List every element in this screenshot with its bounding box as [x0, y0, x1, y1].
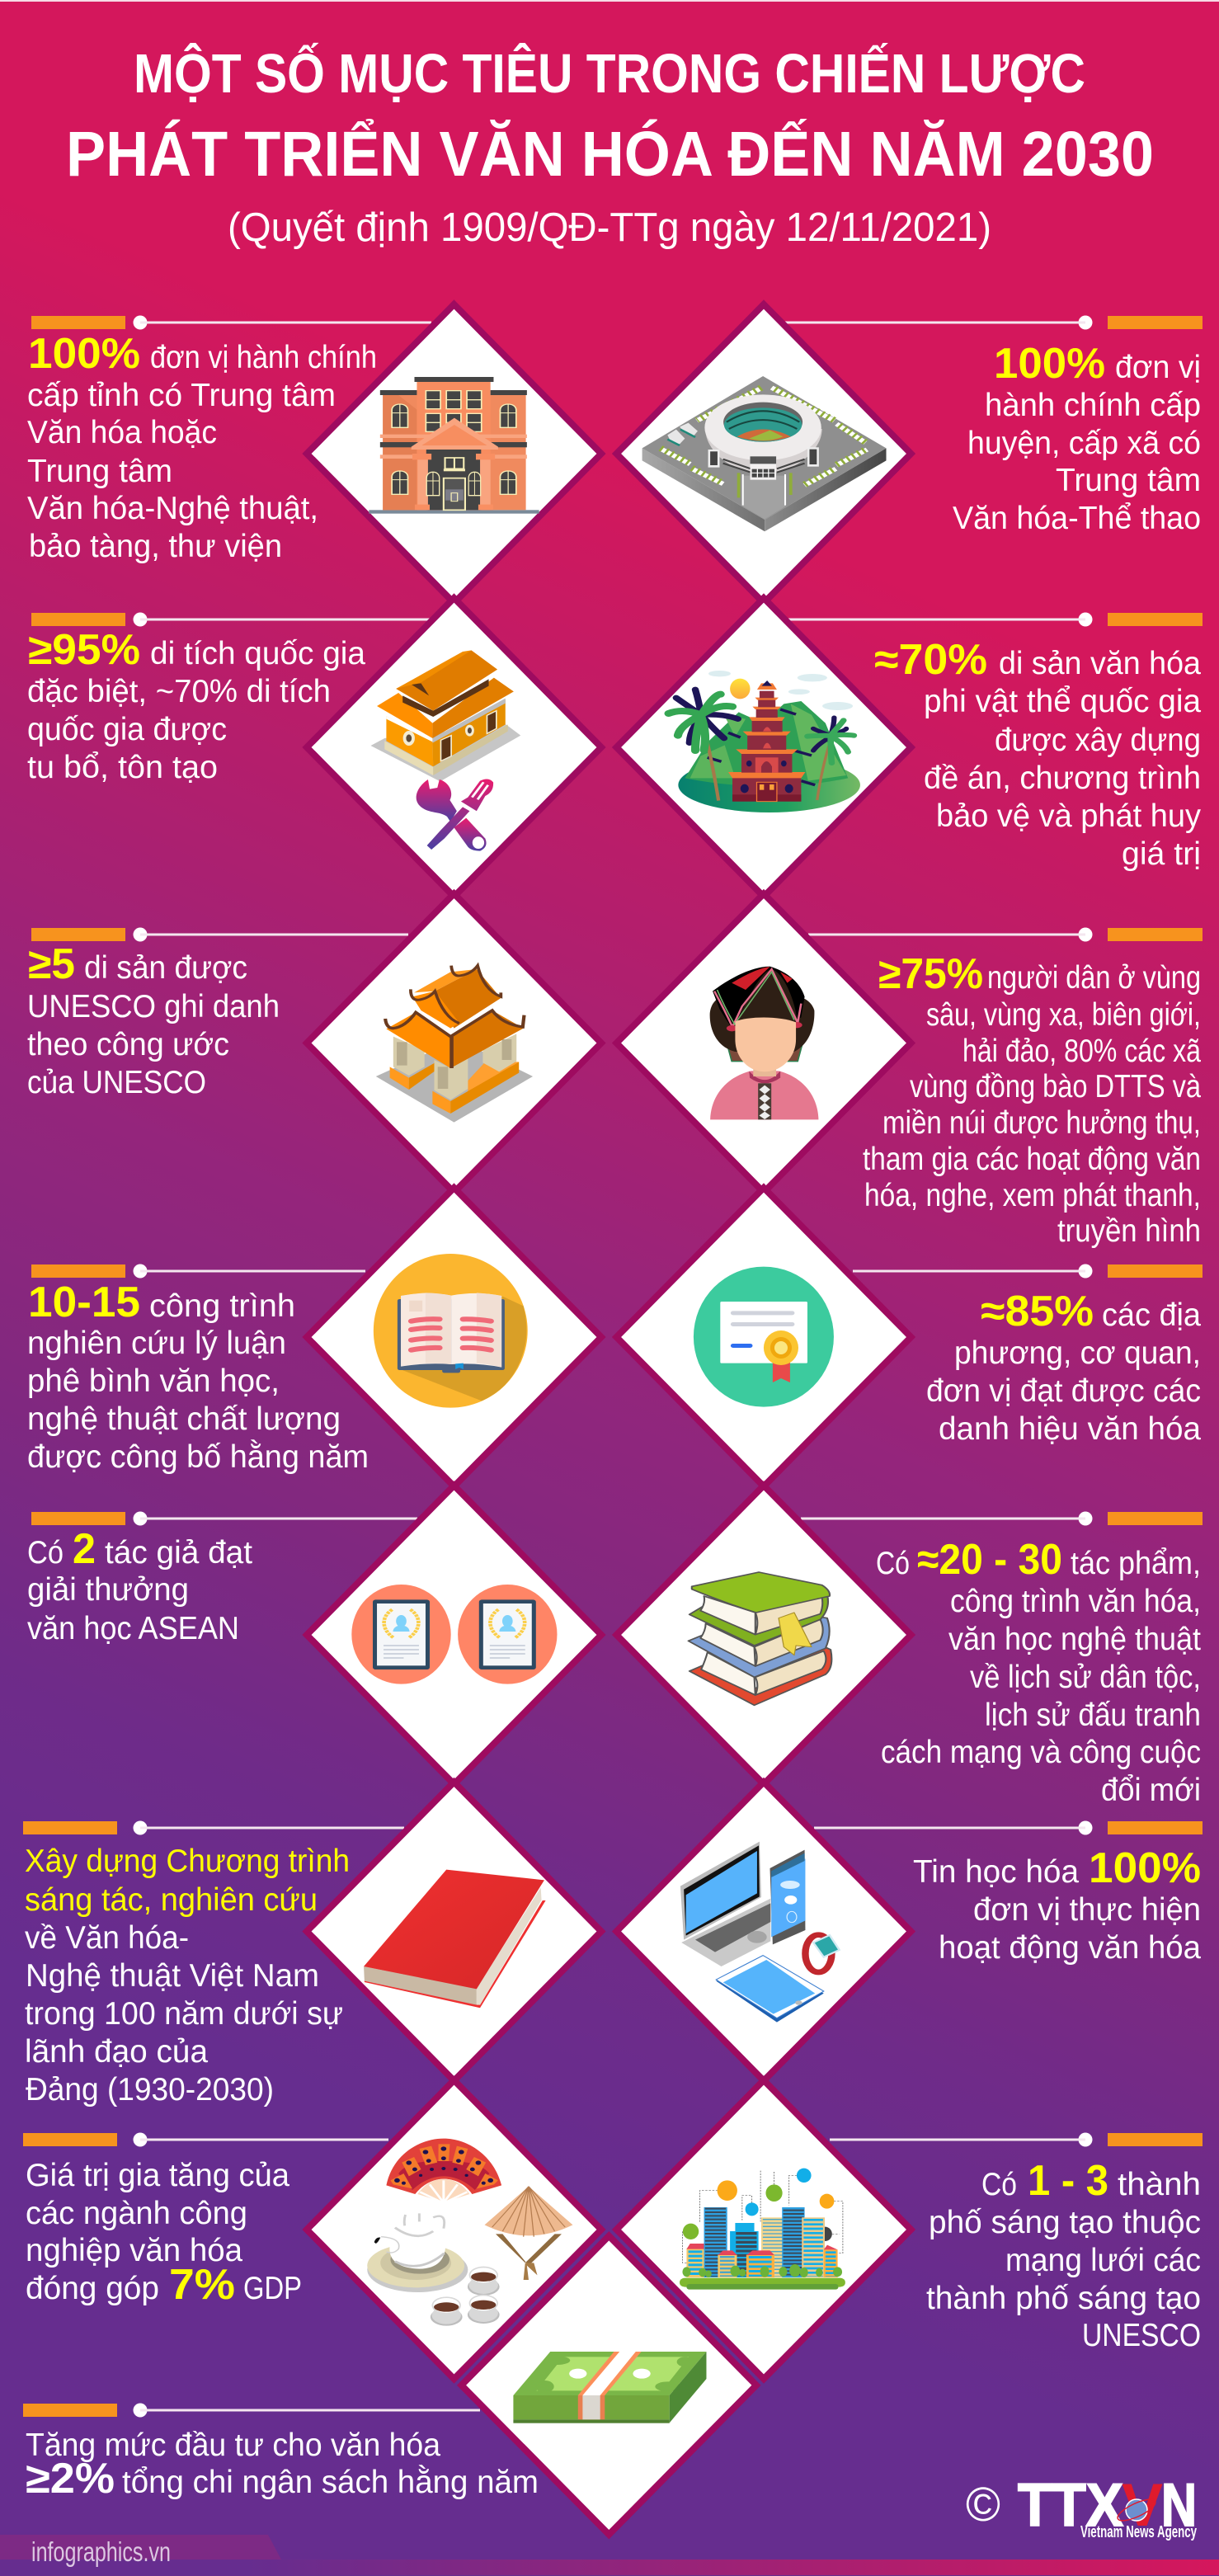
diamond: row 3 left: [307, 894, 601, 1193]
text: 20-30 tác phẩm: Có: [876, 1546, 910, 1581]
panel: item 5 right: [801, 1511, 1203, 1808]
text: 100% cấp huyện: Văn hóa-Thể thao: [953, 501, 1201, 536]
website credit: infographics.vn: [31, 2536, 171, 2567]
panel: item 4 left: [27, 1264, 369, 1475]
text: 5 di sản: [27, 940, 280, 1100]
text: 100% cấp tỉnh: 100%: [28, 330, 140, 378]
text: 100% cấp huyện: đơn vị: [1115, 350, 1201, 385]
text: 70% di sản: ≈70%: [874, 636, 987, 684]
text: chương trình sáng tác: Xây dựng Chương trình: [25, 1844, 350, 1879]
text: 70% di sản: [874, 636, 1201, 872]
text: 7% GDP: GDP: [243, 2271, 302, 2306]
diamond: row 7 left: [307, 2080, 601, 2379]
icon: building: [369, 377, 539, 514]
text: 20-30 tác phẩm: lịch sử đấu tranh: [985, 1698, 1201, 1733]
text: 85% các địa phương: phương, cơ quan,: [954, 1335, 1201, 1371]
panel: item 8: [23, 2404, 539, 2503]
text: 85% các địa phương: ≈85%: [981, 1288, 1094, 1335]
diamond: row 6 right: [617, 1782, 911, 2080]
text: 95% di tích: [27, 626, 365, 785]
text: 2% ngân sách: tổng chi ngân sách hằng năm: [122, 2465, 539, 2500]
text: chương trình sáng tác: về Văn hóa-: [25, 1920, 189, 1956]
text: 1-3 thành phố: 1 - 3: [1028, 2157, 1108, 2205]
panel: item 3 left: [27, 927, 408, 1100]
text: 75% người dân: truyền hình: [1057, 1213, 1201, 1249]
text: 2% ngân sách: [26, 2428, 539, 2503]
panel: item 3 right: [808, 927, 1203, 1249]
text: chương trình sáng tác: sáng tác, nghiên cứu: [25, 1882, 318, 1918]
text: tin học hóa: hoạt động văn hóa: [939, 1930, 1201, 1966]
icon: red book: [364, 1870, 546, 2008]
text: 100% cấp tỉnh: [27, 330, 377, 564]
text: 2 tác giả: tác giả đạt: [105, 1535, 252, 1571]
text: 5 di sản: của UNESCO: [27, 1065, 206, 1100]
logo: TTXVN: [966, 2472, 1198, 2541]
footer tab: [0, 2535, 281, 2560]
text: 100% cấp tỉnh: Văn hóa-Nghệ thuật,: [27, 491, 318, 526]
text: 10-15 công trình: phê bình văn học,: [27, 1363, 280, 1399]
fan: [386, 2139, 501, 2202]
logo: TTXVN: TTX: [1018, 2472, 1123, 2539]
diamond: row 5 left: [307, 1486, 601, 1784]
text: 95% di tích: tu bổ, tôn tạo: [27, 750, 218, 785]
text: 70% di sản: di sản văn hóa: [999, 646, 1201, 681]
text: 5 di sản: theo công ước: [27, 1027, 229, 1062]
icon: fan, teapot and conical hat: [367, 2139, 572, 2326]
icon: ethnic woman: [710, 967, 818, 1119]
panel: item 2 left: [27, 612, 439, 785]
text: tin học hóa: [913, 1844, 1201, 1966]
text: 95% di tích: quốc gia được: [27, 712, 227, 747]
text: 10-15 công trình: nghệ thuật chất lượng: [27, 1401, 341, 1437]
text: 1-3 thành phố: Có: [981, 2167, 1017, 2202]
text: chương trình sáng tác: trong 100 năm dưới sự: [25, 1996, 343, 2032]
text: 100% cấp huyện: [953, 340, 1201, 536]
text: 100% cấp tỉnh: Văn hóa hoặc: [27, 415, 217, 450]
text: 2 tác giả: văn học ASEAN: [27, 1611, 239, 1646]
diamond: row 2 left: [307, 598, 601, 897]
title: (Quyết định 1909/QĐ-TTg ngày 12/11/2021): [228, 205, 991, 250]
text: 95% di tích: đặc biệt, ~70% di tích: [27, 674, 331, 709]
text: 7% GDP: 7%: [169, 2261, 235, 2309]
text: 75% người dân: [863, 950, 1201, 1249]
panel: item 6 left: [23, 1821, 404, 2107]
text: 2 tác giả: Có: [27, 1535, 64, 1571]
text: 5 di sản: UNESCO ghi danh: [27, 989, 280, 1024]
text: 1-3 thành phố: thành: [1118, 2167, 1201, 2202]
icon: pagoda and palms: [669, 671, 860, 812]
logo: TTXVN: N: [1161, 2472, 1197, 2539]
icon: stadium: [642, 376, 886, 531]
text: 5 di sản: ≥5: [28, 940, 75, 988]
icon: two diplomas: [351, 1585, 557, 1684]
text: 95% di tích: ≥95%: [28, 626, 140, 674]
text: 85% các địa phương: [926, 1288, 1201, 1447]
text: 10-15 công trình: công trình: [149, 1288, 295, 1324]
text: 10-15 công trình: [27, 1279, 369, 1475]
text: 10-15 công trình: được công bố hằng năm: [27, 1439, 369, 1475]
text: 20-30 tác phẩm: đổi mới: [1101, 1773, 1201, 1808]
text: 2 tác giả: [27, 1525, 252, 1646]
text: 2% ngân sách: Tăng mức đầu tư cho văn hóa: [26, 2428, 440, 2463]
text: 7% GDP: các ngành công: [26, 2196, 247, 2231]
footer strip: [0, 2560, 1219, 2575]
icon: digital devices: [680, 1842, 840, 2023]
text: 20-30 tác phẩm: văn học nghệ thuật: [948, 1622, 1201, 1657]
text: 1-3 thành phố: UNESCO: [1082, 2318, 1201, 2353]
top edge line: [0, 0, 1219, 2]
text: 10-15 công trình: nghiên cứu lý luận: [27, 1326, 286, 1361]
text: 95% di tích: di tích quốc gia: [150, 636, 365, 671]
text: 7% GDP: đóng góp: [26, 2271, 159, 2306]
panel: item 6 right: [814, 1821, 1203, 1966]
text: 1-3 thành phố: phố sáng tạo thuộc: [929, 2205, 1201, 2240]
text: 70% di sản: bảo vệ và phát huy: [936, 798, 1201, 834]
text: 20-30 tác phẩm: tác phẩm,: [1071, 1546, 1201, 1581]
text: 100% cấp huyện: Trung tâm: [1056, 463, 1201, 498]
text: 20-30 tác phẩm: [876, 1536, 1201, 1808]
logo: TTXVN: V: [1122, 2472, 1163, 2539]
text: 85% các địa phương: danh hiệu văn hóa: [939, 1411, 1201, 1447]
text: 100% cấp tỉnh: bảo tàng, thư viện: [29, 529, 282, 564]
teapot set: [367, 2213, 500, 2326]
text: 100% cấp huyện: hành chính cấp: [985, 388, 1201, 423]
icon: open book on yellow circle: [374, 1254, 528, 1408]
text: 7% GDP: [26, 2158, 302, 2309]
text: tin học hóa: Tin học hóa: [913, 1854, 1079, 1890]
text: 20-30 tác phẩm: ≈20 - 30: [917, 1536, 1062, 1584]
text: 2 tác giả: 2: [73, 1525, 96, 1573]
panel: item 5 left: [27, 1511, 417, 1646]
text: 70% di sản: được xây dựng: [995, 723, 1201, 758]
text: 5 di sản: di sản được: [84, 950, 247, 986]
icon: stack of books: [689, 1572, 831, 1705]
title: [66, 42, 1154, 250]
text: 7% GDP: nghiệp văn hóa: [26, 2233, 242, 2268]
icon: temple: [376, 966, 533, 1123]
text: 100% cấp huyện: 100%: [994, 340, 1105, 388]
text: chương trình sáng tác: Đảng (1930-2030): [26, 2072, 274, 2107]
text: 70% di sản: đề án, chương trình: [924, 761, 1201, 796]
panel: item 4 right: [853, 1264, 1203, 1447]
panel: item 7 right: [830, 2133, 1203, 2353]
diamond: row 3 right: [617, 894, 911, 1193]
panel: item 2 right: [784, 612, 1203, 872]
diamond: row 4 right: [617, 1188, 911, 1486]
diamond: row 7 right: [617, 2080, 911, 2379]
text: 2% ngân sách: ≥2%: [26, 2455, 115, 2503]
diamond: row 4 left: [307, 1188, 601, 1486]
text: 2 tác giả: giải thưởng: [27, 1572, 189, 1608]
icon: restored house and tools: [370, 650, 520, 851]
text: 1-3 thành phố: mạng lưới các: [1005, 2243, 1201, 2278]
panel: item 1 left: [27, 315, 431, 564]
text: 70% di sản: phi vật thể quốc gia: [924, 684, 1201, 719]
text: tin học hóa: đơn vị thực hiện: [973, 1892, 1201, 1928]
text: 20-30 tác phẩm: công trình văn hóa,: [950, 1584, 1201, 1619]
conical hat: [485, 2187, 572, 2280]
text: 1-3 thành phố: [926, 2157, 1201, 2353]
diamond: row 5 right: [617, 1486, 911, 1784]
text: chương trình sáng tác: [25, 1844, 350, 2107]
diamond: row 6 left: [307, 1782, 601, 2080]
text: 100% cấp huyện: huyện, cấp xã có: [967, 426, 1201, 461]
panel: item 7 left: [23, 2133, 388, 2309]
title: PHÁT TRIỂN VĂN HÓA ĐẾN NĂM 2030: [66, 118, 1154, 190]
icon: stack of money: [513, 2352, 706, 2423]
text: 10-15 công trình: 10-15: [28, 1279, 140, 1326]
text: 1-3 thành phố: thành phố sáng tạo: [926, 2281, 1201, 2316]
title: MỘT SỐ MỤC TIÊU TRONG CHIẾN LƯỢC: [134, 42, 1085, 105]
icon: certificate: [694, 1267, 834, 1407]
panel: item 1 right: [784, 315, 1203, 536]
text: 100% cấp tỉnh: Trung tâm: [27, 454, 172, 489]
diamond: budget money: [462, 2236, 756, 2535]
diamond: row 1 left: [307, 304, 601, 603]
text: 75% người dân: ≥75%: [878, 950, 983, 998]
text: chương trình sáng tác: lãnh đạo của: [25, 2034, 208, 2070]
text: chương trình sáng tác: Nghệ thuật Việt Nam: [26, 1958, 319, 1994]
logo: TTXVN: ©: [966, 2478, 1000, 2531]
icon: creative city: [680, 2169, 845, 2290]
text: 100% cấp tỉnh: đơn vị hành chính: [150, 340, 377, 375]
text: 100% cấp tỉnh: cấp tỉnh có Trung tâm: [27, 378, 336, 413]
text: 70% di sản: giá trị: [1122, 836, 1201, 872]
text: 85% các địa phương: các địa: [1102, 1297, 1201, 1333]
diamond: row 1 right: [617, 304, 911, 603]
diamond: row 2 right: [617, 598, 911, 897]
text: tin học hóa: 100%: [1089, 1844, 1201, 1892]
text: 7% GDP: Giá trị gia tăng của: [26, 2158, 289, 2193]
text: 85% các địa phương: đơn vị đạt được các: [926, 1373, 1201, 1409]
